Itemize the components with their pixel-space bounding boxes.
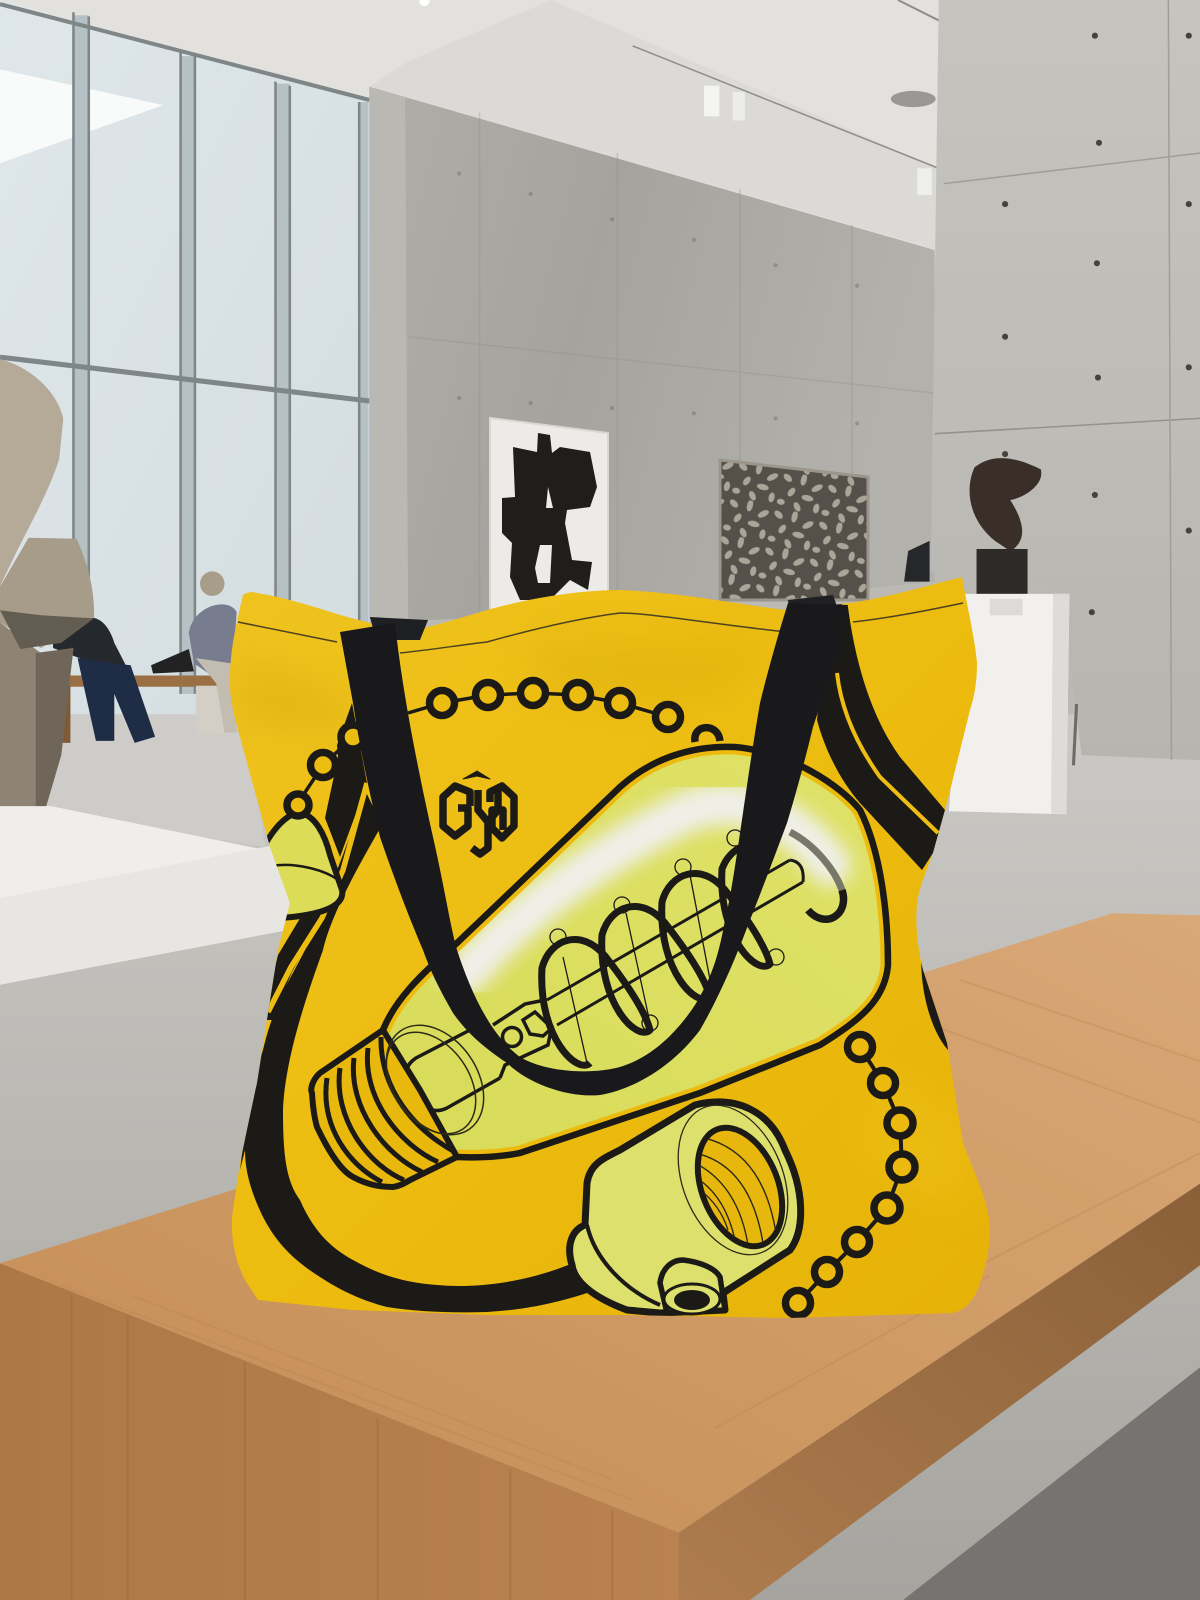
chain upper bbox=[287, 680, 720, 816]
logo bbox=[443, 771, 514, 854]
spiral filament bbox=[542, 830, 844, 1065]
socket bbox=[570, 1089, 809, 1314]
bench side face bbox=[679, 1184, 1200, 1600]
stitching line bbox=[238, 603, 963, 653]
bag body bbox=[230, 577, 990, 1318]
lower right floor shadow bbox=[903, 1367, 1200, 1600]
screw base bbox=[308, 1024, 484, 1190]
cone fitting bbox=[262, 813, 342, 918]
front strap bbox=[340, 603, 848, 1095]
bulb glass bbox=[383, 747, 888, 1157]
window wall bbox=[0, 0, 369, 847]
fabric shading bbox=[255, 682, 317, 716]
left cord bbox=[240, 703, 587, 1312]
bench front face bbox=[0, 1263, 679, 1600]
tote bag bbox=[230, 577, 990, 1318]
inner stem bbox=[407, 860, 803, 1111]
concrete back wall bbox=[369, 87, 935, 622]
right concrete column bbox=[931, 0, 1200, 760]
bench top bbox=[0, 913, 1200, 1533]
bronze sculpture on plinth bbox=[904, 458, 1041, 594]
white platform bbox=[0, 806, 296, 985]
cord accent line bbox=[268, 783, 367, 1012]
light bulb bbox=[383, 747, 888, 1157]
painting: speckled canvas bbox=[720, 460, 868, 600]
stone sculpture bbox=[0, 359, 94, 852]
floor bbox=[0, 714, 1200, 1600]
back strap pieces bbox=[370, 595, 840, 640]
cord blob right bbox=[921, 962, 948, 1050]
white pedestal bbox=[949, 594, 1077, 814]
bulb outline bbox=[383, 747, 888, 1157]
right stripes bbox=[817, 600, 945, 870]
printed artwork bbox=[238, 600, 980, 1316]
painting: black abstract bbox=[490, 418, 608, 610]
bulb inner rim and highlight bbox=[383, 747, 888, 1157]
chain lower bbox=[786, 1034, 915, 1316]
ceiling bbox=[0, 0, 1200, 306]
seated visitors on bench bbox=[53, 571, 237, 743]
